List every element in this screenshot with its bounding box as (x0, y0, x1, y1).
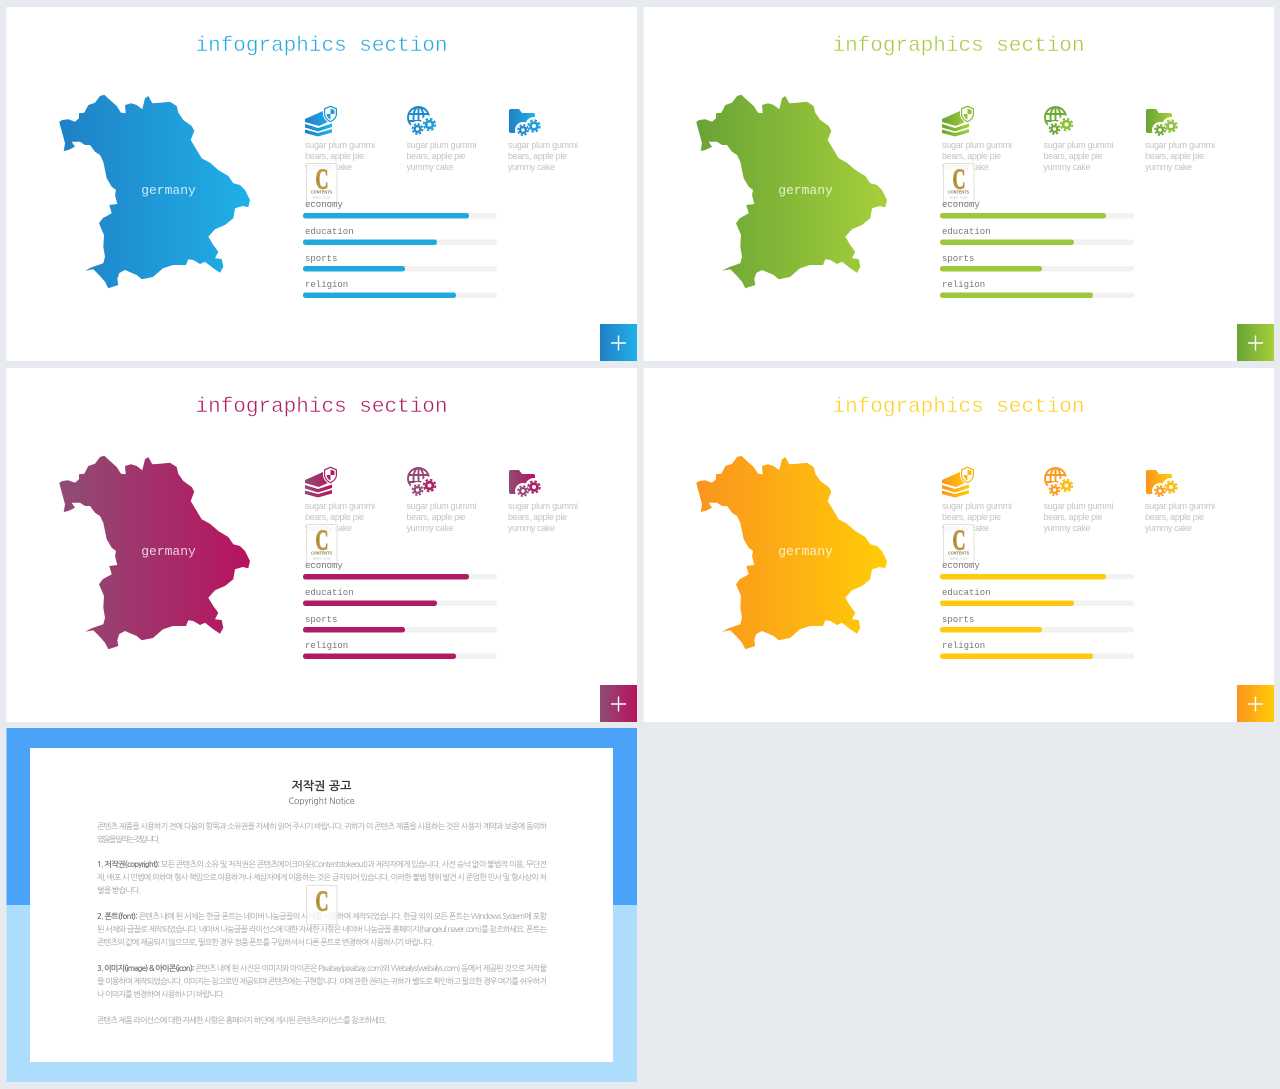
icon: globe with gears (1045, 468, 1076, 498)
heading: copyright notice: 저작권 공고 (292, 779, 352, 792)
text block: column 2: bears, apple pie (406, 512, 466, 522)
watermark badge: CONTENTS (311, 190, 332, 194)
icon: globe with gears (1045, 107, 1076, 137)
text block: image clause: 3. 이미지(image) & 아이콘(icon): 콘텐츠 내에 된 사진은 이미지와 아이콘은 Pixabay(pixabay.com)와 Webalys(webalys.com) 등에서 제공된 것으로 저작물 (97, 963, 547, 973)
text block: column 1: sugar plum gummi (305, 140, 375, 150)
panel: copyright notice (6, 728, 637, 1082)
watermark badge: CONTENTS (311, 550, 332, 556)
bar chart: topics: sports (942, 254, 974, 264)
icon: layers with shield (305, 466, 338, 498)
watermark badge: MAKE .COM (950, 556, 968, 560)
text block: column 3: sugar plum gummi (508, 501, 578, 511)
plus button (1237, 685, 1274, 722)
text block: column 1: bears, apple pie (305, 512, 364, 522)
text block: column 2: bears, apple pie (406, 151, 466, 161)
text block: column 1: bears, apple pie (305, 151, 364, 161)
text block: column 3: yummy cake (1145, 523, 1192, 533)
text block: image clause (97, 963, 547, 999)
text block: column 3: yummy cake (1145, 162, 1192, 172)
bar chart: topics: religion (305, 641, 348, 651)
icon: layers with shield (942, 105, 974, 136)
plus button (1237, 324, 1274, 361)
map: germany region: germany (141, 183, 196, 198)
bar chart: topics (303, 200, 497, 298)
map: germany region: germany (141, 544, 196, 559)
icon: layers with shield (305, 105, 338, 136)
text block: column 3 (1145, 501, 1215, 533)
watermark badge: C (952, 524, 966, 556)
text block: column 2: sugar plum gummi (406, 501, 476, 511)
bar chart: topics (303, 561, 497, 659)
map: germany region (59, 456, 250, 649)
watermark badge: C (316, 164, 328, 196)
bar chart: topics: education (305, 227, 354, 237)
bar chart: topics: sports (305, 254, 337, 264)
text block: column 1 (942, 501, 1012, 533)
text block: column 2: sugar plum gummi (1044, 140, 1114, 150)
bar chart: topics: education (305, 588, 354, 598)
bar chart: topics: economy (942, 561, 980, 571)
text block: column 2: yummy cake (406, 523, 454, 533)
text block: column 2: yummy cake (1044, 523, 1090, 533)
text block: column 3 (1145, 140, 1215, 172)
text block: copyright clause: 벌을 받습니다. (97, 886, 141, 895)
watermark badge: C (316, 524, 328, 556)
text block: font clause (97, 911, 547, 947)
watermark badge: C (316, 886, 328, 918)
title: infographics section (195, 396, 448, 419)
text block: font clause: 된 서체와 글꼴로 제작되었습니다. 네이버 나눔글꼴 라이선스에 대한 자세한 사항은 네이버 나눔글꼴 홈페이지(hangeul.naver.com)를 참조하세요. 폰트는 (97, 924, 547, 934)
text block: column 2 (1044, 140, 1114, 172)
panel: yellow germany infographic (644, 368, 1274, 722)
text block: column 2: sugar plum gummi (406, 140, 476, 150)
map: germany region (696, 95, 887, 288)
text block: column 3 (508, 501, 578, 533)
bar chart: topics: economy (305, 200, 343, 210)
text block: column 1: yummy cake (305, 162, 352, 172)
text block: column 1 (305, 140, 375, 172)
bar chart: topics: education (942, 588, 991, 598)
bar chart: topics: religion (942, 641, 985, 651)
text block: column 1: bears, apple pie (942, 512, 1001, 522)
map: germany region: germany (778, 183, 833, 198)
bar chart: topics: economy (942, 200, 980, 210)
icon: folder with gears (1146, 109, 1180, 138)
icon: folder with gears (1146, 470, 1180, 499)
text block: column 2: yummy cake (406, 162, 454, 172)
icon: layers with shield (942, 466, 974, 498)
bar chart: topics: religion (942, 280, 985, 290)
bar chart: topics: sports (305, 615, 337, 625)
text block: font clause: 콘텐츠의 값에 제공되지 않으므로, 필요한 경우 정품 폰트를 구입하셔서 다른 폰트로 변경하여 사용하시기 바랍니다. (97, 938, 434, 947)
icon: folder with gears (509, 109, 543, 138)
watermark badge (306, 164, 337, 202)
watermark badge (944, 524, 974, 564)
map: germany region: germany (778, 544, 833, 559)
text block: column 3 (508, 140, 578, 172)
text block: column 3: bears, apple pie (1145, 151, 1204, 161)
text block: column 2: bears, apple pie (1044, 512, 1102, 522)
watermark badge (306, 524, 337, 564)
text block: column 2 (406, 501, 476, 533)
title: infographics section (832, 35, 1085, 58)
text block: column 3: sugar plum gummi (508, 140, 578, 150)
icon: globe with gears (408, 468, 438, 498)
text block: font clause: 2. 폰트(font): 콘텐츠 내에 된 서체는 한글 폰트는 네이버 나눔글꼴의 서체를 사용하여 제작되었습니다. 한글 외의 모든 폰트는 Windows System에 포함 (97, 911, 547, 921)
bar chart: topics (940, 200, 1134, 298)
text block: column 3: bears, apple pie (1145, 512, 1204, 522)
plus button (600, 685, 637, 722)
plus button (600, 324, 637, 361)
text block: column 3: sugar plum gummi (1145, 501, 1215, 511)
panel: green germany infographic (644, 7, 1274, 361)
text block: column 2: bears, apple pie (1044, 151, 1102, 161)
text block: column 2: sugar plum gummi (1044, 501, 1114, 511)
text block: column 3: yummy cake (508, 162, 555, 172)
text block: column 2 (1044, 501, 1114, 533)
text block: column 1 (305, 501, 375, 533)
text block: column 2 (406, 140, 476, 172)
text block: column 1 (942, 140, 1012, 172)
text block: image clause: 을 이용하여 제작되었습니다. 이미지는 참고로만 제공되며 콘텐츠에는 구현합니다. 이에 관한 권리는 귀하가 별도로 확인하고 필요한 경우 여기를 쉬우하거 (97, 977, 547, 986)
watermark badge (944, 164, 974, 202)
text block: column 3: bears, apple pie (508, 512, 567, 522)
watermark badge: MAKE .COM (950, 196, 968, 200)
heading: copyright notice (288, 779, 355, 806)
bar chart: topics: religion (305, 280, 348, 290)
text block: column 2: yummy cake (1044, 162, 1090, 172)
watermark badge: MAKE .COM (313, 196, 331, 200)
watermark badge (306, 886, 337, 924)
text block: column 1: yummy cake (305, 523, 352, 533)
map: germany region (696, 456, 887, 649)
text block: column 1: sugar plum gummi (942, 140, 1012, 150)
text block: license note: 콘텐츠 제품 라이선스에 대한 자세한 사항은 홈페이지 하단에 게시된 콘텐츠라이선스를 참조하세요. (97, 1016, 387, 1025)
watermark badge: CONTENTS (948, 190, 969, 194)
title: infographics section (195, 35, 448, 58)
icon: folder with gears (509, 470, 543, 499)
panel: maroon germany infographic (6, 368, 637, 722)
text block: copyright clause (97, 859, 547, 895)
title: infographics section (832, 396, 1085, 419)
text block: column 1: sugar plum gummi (305, 501, 375, 511)
text block: intro (97, 822, 547, 844)
text block: column 3: yummy cake (508, 523, 555, 533)
watermark badge: C (952, 164, 966, 196)
watermark badge: MAKE .COM (313, 556, 331, 560)
bar chart: topics: sports (942, 615, 974, 625)
text block: copyright clause: 재, 배포 시 민법에 의하여 형사 책임으로 이용하거나 제삼자에게 이용하는 것은 금지되어 있습니다. 이러한 불법 행위 발견 시 준엄한 민사 및 형사상의 처 (97, 873, 547, 882)
text block: image clause: 나 이미지를 변경하여 사용하시기 바랍니다. (97, 990, 225, 999)
text block: column 3: sugar plum gummi (1145, 140, 1215, 150)
bar chart: topics: economy (305, 561, 343, 571)
text block: column 3: bears, apple pie (508, 151, 567, 161)
text block: column 1: bears, apple pie (942, 151, 1001, 161)
text block: column 1: yummy cake (942, 162, 989, 172)
bar chart: topics: education (942, 227, 991, 237)
text block: intro: 였음을 알리는 것입니다. (97, 835, 160, 844)
bar chart: topics (940, 561, 1134, 659)
map: germany region (59, 95, 250, 288)
panel: blue germany infographic (6, 7, 637, 361)
text block: column 1: yummy cake (942, 523, 989, 533)
watermark badge: CONTENTS (948, 550, 969, 556)
text block: intro: 콘텐츠 제품을 사용하기 전에 다음의 항목과 소유권을 자세히 읽어 주시기 바랍니다. 귀하가 이 콘텐츠 제품을 사용하는 것은 사용자 계약과 보증에 동의하 (97, 822, 547, 831)
text block: copyright clause: 1. 저작권(copyright): 모든 콘텐츠의 소유 및 저작권은 콘텐츠메이크아웃(Contentstokeout)과 제작자에게 있습니다. 사전 승낙 없이 불법적 이용, 무단전 (97, 859, 547, 869)
heading: copyright notice: Copyright Notice (288, 797, 355, 806)
text block: column 1: sugar plum gummi (942, 501, 1012, 511)
icon: globe with gears (408, 107, 438, 137)
